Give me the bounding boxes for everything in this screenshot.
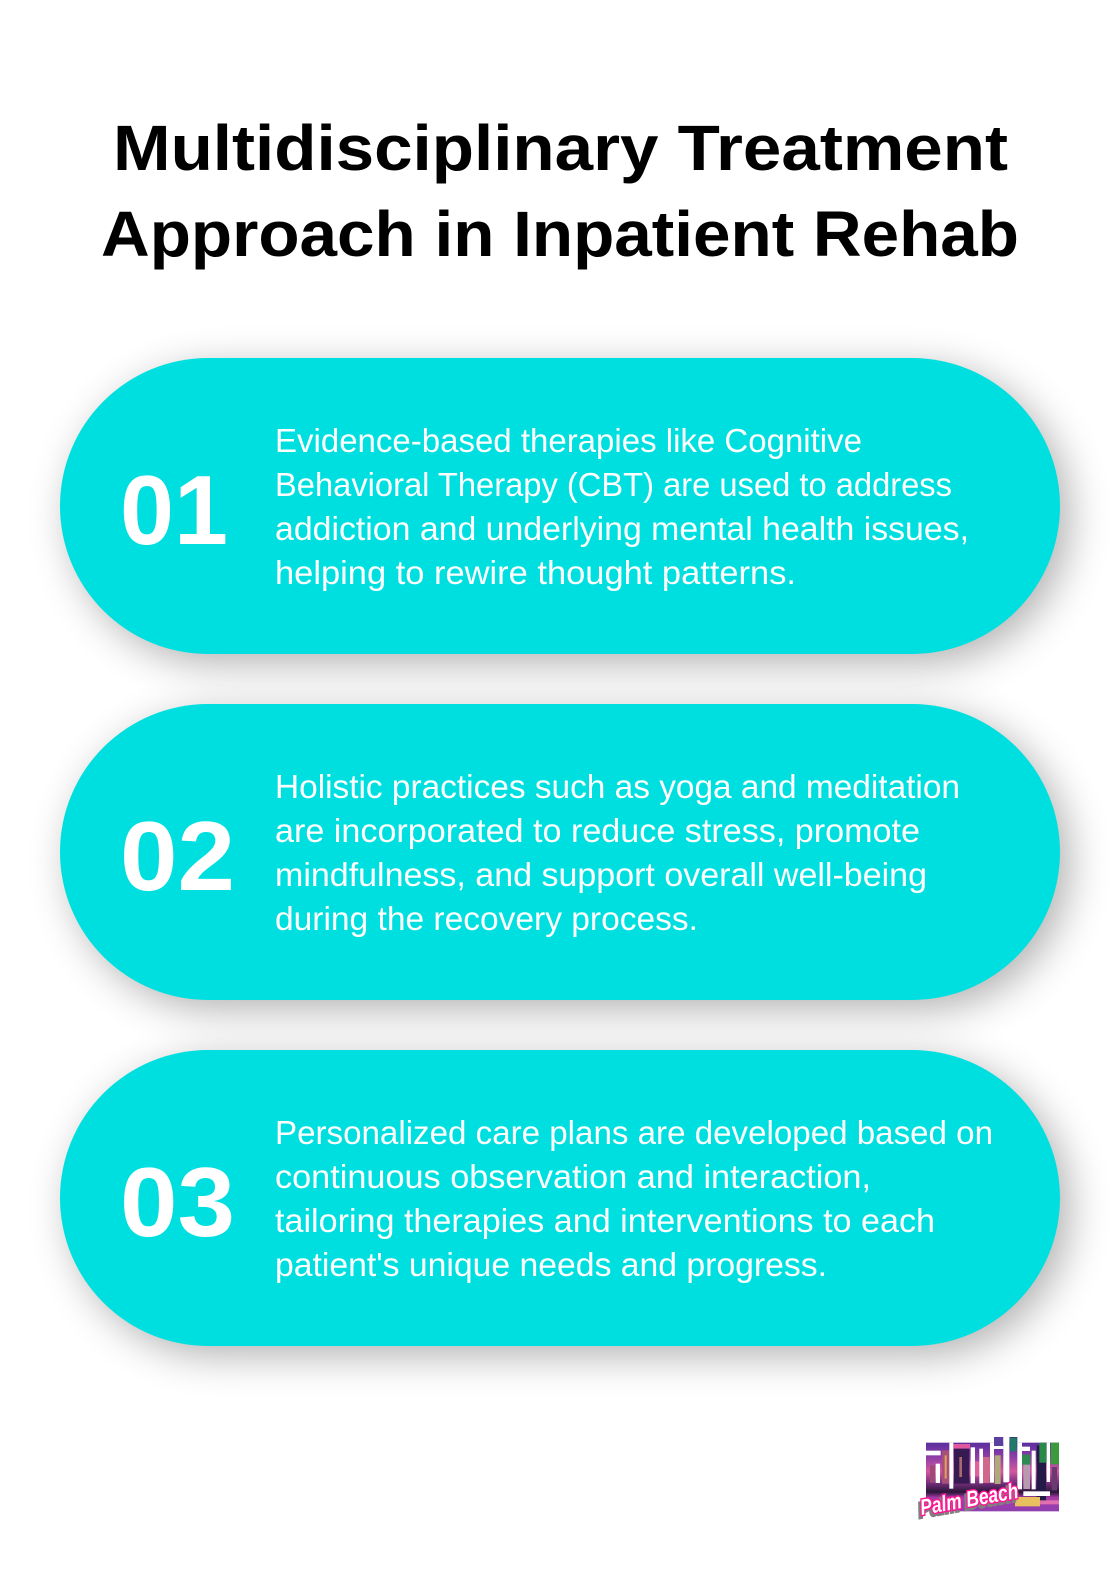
step 02 description <box>275 768 960 937</box>
panel: step 03 <box>60 1050 1060 1346</box>
step 01 description: Behavioral Therapy (CBT) are used to address <box>275 466 952 503</box>
step number 02: 02 <box>120 801 235 911</box>
buildings and palms <box>942 1450 950 1484</box>
step 03 description: continuous observation and interaction, <box>275 1158 871 1195</box>
step 01 description: Evidence-based therapies like Cognitive <box>275 422 862 459</box>
step 03 description: patient's unique needs and progress. <box>275 1246 827 1283</box>
step 03 description: tailoring therapies and interventions to each <box>275 1202 935 1239</box>
white letter gaps <box>926 1437 1050 1496</box>
panel: step 01 <box>60 358 1060 654</box>
step number 03: 03 <box>120 1147 235 1257</box>
step 02 description: are incorporated to reduce stress, promote <box>275 812 920 849</box>
step 02 description: mindfulness, and support overall well-being <box>275 856 927 893</box>
title: Multidisciplinary Treatment <box>113 112 1008 184</box>
step 02 description: during the recovery process. <box>275 900 698 937</box>
title: Approach in Inpatient Rehab <box>101 198 1019 270</box>
script wordmark: Palm Beach <box>916 1481 1018 1522</box>
step number 01: 01 <box>120 455 228 565</box>
step 01 description <box>275 422 969 591</box>
step 03 description <box>275 1114 993 1283</box>
logo: Amity Palm Beach <box>916 1437 1059 1522</box>
title <box>101 112 1019 270</box>
step 01 description: helping to rewire thought patterns. <box>275 554 796 591</box>
step 02 description: Holistic practices such as yoga and meditation <box>275 768 960 805</box>
step 03 description: Personalized care plans are developed based on <box>275 1114 993 1151</box>
script wordmark: Palm Beach <box>918 1478 1020 1520</box>
panel: step 02 <box>60 704 1060 1000</box>
step 01 description: addiction and underlying mental health issues, <box>275 510 969 547</box>
